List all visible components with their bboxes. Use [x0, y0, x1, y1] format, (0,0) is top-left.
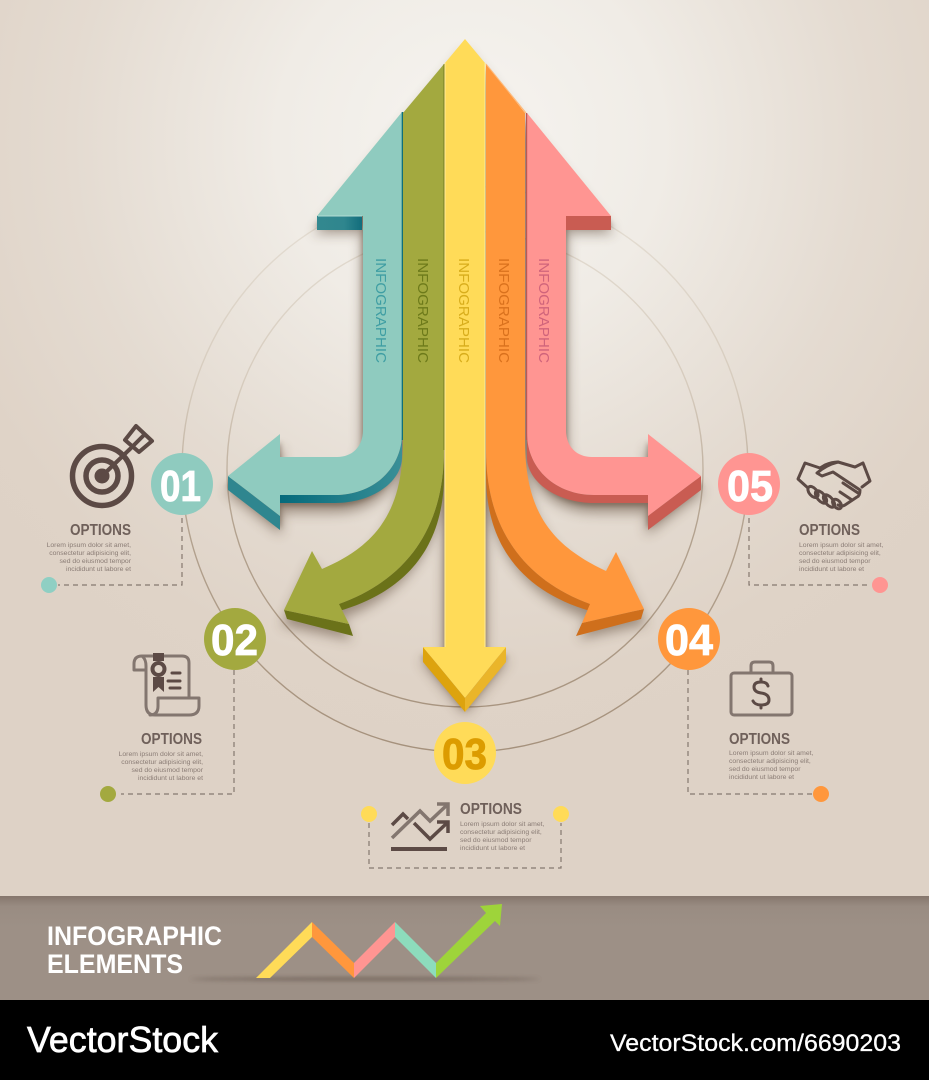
- arrow 4: orange: [486, 64, 644, 636]
- heading 01: OPTIONS: [70, 522, 131, 539]
- number 02: 02: [211, 616, 258, 665]
- number 03: 03: [442, 730, 487, 779]
- connector 05: [749, 518, 871, 585]
- arrow 5: pink: [526, 113, 701, 530]
- heading 04: OPTIONS: [729, 731, 790, 748]
- text 04: incididunt ut labore et: [729, 774, 794, 781]
- connector 02: [121, 670, 234, 794]
- icon: trend chart: [391, 804, 448, 849]
- badge 05: [718, 453, 780, 515]
- text 03: consectetur adipisicing elit,: [460, 829, 542, 836]
- text 01: sed do eiusmod tempor: [59, 558, 132, 565]
- number 01: 01: [160, 462, 201, 511]
- item 05: [718, 453, 888, 593]
- arrow 1: teal: [228, 112, 402, 530]
- text 04: [729, 750, 814, 781]
- watermark right: VectorStock.com/6690203: [610, 1030, 901, 1057]
- text 05: consectetur adipisicing elit,: [799, 550, 881, 557]
- text 05: Lorem ipsum dolor sit amet,: [799, 542, 884, 549]
- footer bar: [0, 1000, 929, 1080]
- vertical arrow labels: [372, 258, 552, 363]
- text 04: Lorem ipsum dolor sit amet,: [729, 750, 814, 757]
- badge 04: [658, 608, 720, 670]
- zigzag arrow: [190, 904, 540, 980]
- heading 05: OPTIONS: [799, 522, 860, 539]
- text 04: consectetur adipisicing elit,: [729, 758, 811, 765]
- text 03: sed do eiusmod tempor: [460, 837, 532, 844]
- badge 03: [434, 722, 496, 784]
- icon: diploma: [134, 653, 199, 715]
- label: yellow arrow: INFOGRAPHIC: [455, 258, 472, 363]
- text 01: consectetur adipisicing elit,: [49, 550, 131, 557]
- item 03: [361, 722, 569, 868]
- text 01: [47, 542, 132, 573]
- connector 01: [58, 518, 182, 585]
- band title: ELEMENTS: [47, 949, 183, 979]
- text 01: incididunt ut labore et: [66, 566, 131, 573]
- dot 03 left: [361, 806, 377, 822]
- arrow shadows: [228, 49, 701, 712]
- text 04: sed do eiusmod tempor: [729, 766, 801, 773]
- text 03: incididunt ut labore et: [460, 845, 525, 852]
- text 05: sed do eiusmod tempor: [799, 558, 871, 565]
- icon: briefcase: [731, 662, 792, 715]
- item 02: [100, 608, 266, 802]
- text 02: consectetur adipisicing elit,: [121, 759, 203, 766]
- dot 04: [813, 786, 829, 802]
- text 02: Lorem ipsum dolor sit amet,: [119, 751, 203, 758]
- text 02: [119, 751, 204, 782]
- concentric guide circles: [182, 186, 748, 752]
- text 02: incididunt ut labore et: [138, 775, 203, 782]
- arrow 2: olive: [284, 64, 444, 636]
- band title: [47, 921, 222, 979]
- dot 03 right: [553, 806, 569, 822]
- number 05: 05: [727, 462, 773, 511]
- band title: INFOGRAPHIC: [47, 921, 222, 951]
- dot 02: [100, 786, 116, 802]
- badge 02: [204, 608, 266, 670]
- heading 03: OPTIONS: [460, 801, 522, 818]
- dot 05: [872, 577, 888, 593]
- badge 01: [151, 453, 213, 515]
- bottom band: [0, 896, 929, 1000]
- label: pink arrow: INFOGRAPHIC: [535, 258, 552, 363]
- icon: handshake: [798, 462, 870, 510]
- item 04: [658, 608, 829, 802]
- text 01: Lorem ipsum dolor sit amet,: [47, 542, 131, 549]
- arrow 3: yellow: [423, 39, 506, 712]
- number 04: 04: [665, 616, 714, 665]
- label: olive arrow: INFOGRAPHIC: [414, 258, 431, 363]
- item 01: [41, 426, 213, 593]
- label: orange arrow: INFOGRAPHIC: [495, 258, 512, 363]
- heading 02: OPTIONS: [141, 731, 202, 748]
- dot 01: [41, 577, 57, 593]
- text 03: Lorem ipsum dolor sit amet,: [460, 821, 545, 828]
- text 03: [460, 821, 545, 852]
- text 02: sed do eiusmod tempor: [131, 767, 204, 774]
- connector 03: [369, 823, 561, 868]
- label: teal arrow: INFOGRAPHIC: [372, 258, 389, 363]
- text 05: [799, 542, 884, 573]
- icon: target: [72, 426, 152, 506]
- text 05: incididunt ut labore et: [799, 566, 864, 573]
- connector 04: [688, 670, 812, 794]
- watermark left: VectorStock: [27, 1019, 219, 1060]
